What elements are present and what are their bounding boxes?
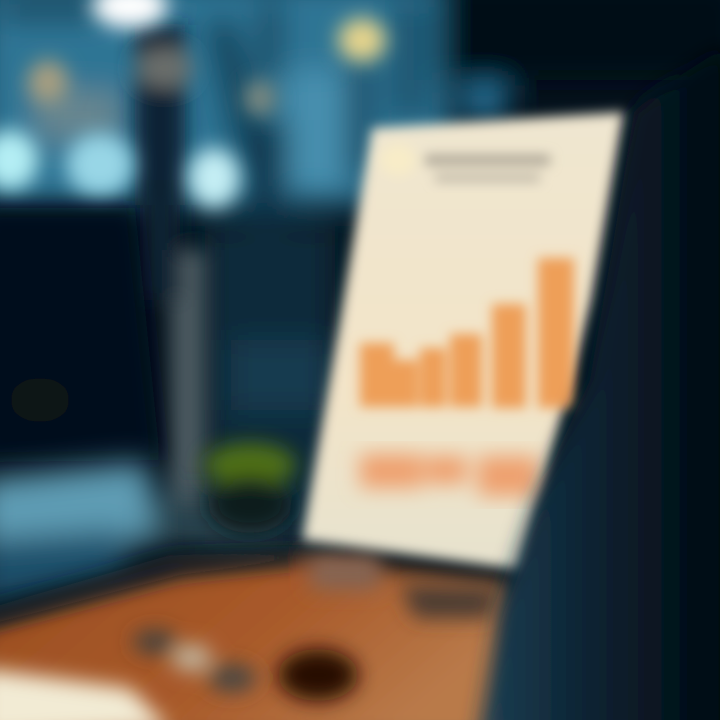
dark monitor on left xyxy=(0,208,160,462)
pen on table xyxy=(133,630,358,701)
table back edge shadow xyxy=(0,550,500,628)
lower left blue keyboard area xyxy=(0,462,280,605)
document title smudge xyxy=(380,144,550,182)
dark post xyxy=(135,25,206,520)
orange bar chart xyxy=(360,258,574,408)
background: windows and office structure xyxy=(0,0,720,545)
orange table row smudges xyxy=(360,454,538,496)
document sheet xyxy=(302,112,625,570)
wooden table xyxy=(0,558,510,720)
chart document xyxy=(302,112,625,570)
green plant xyxy=(204,443,296,533)
window highlights xyxy=(0,0,386,208)
person silhouette on right xyxy=(478,50,720,720)
white paper on table xyxy=(0,668,170,720)
